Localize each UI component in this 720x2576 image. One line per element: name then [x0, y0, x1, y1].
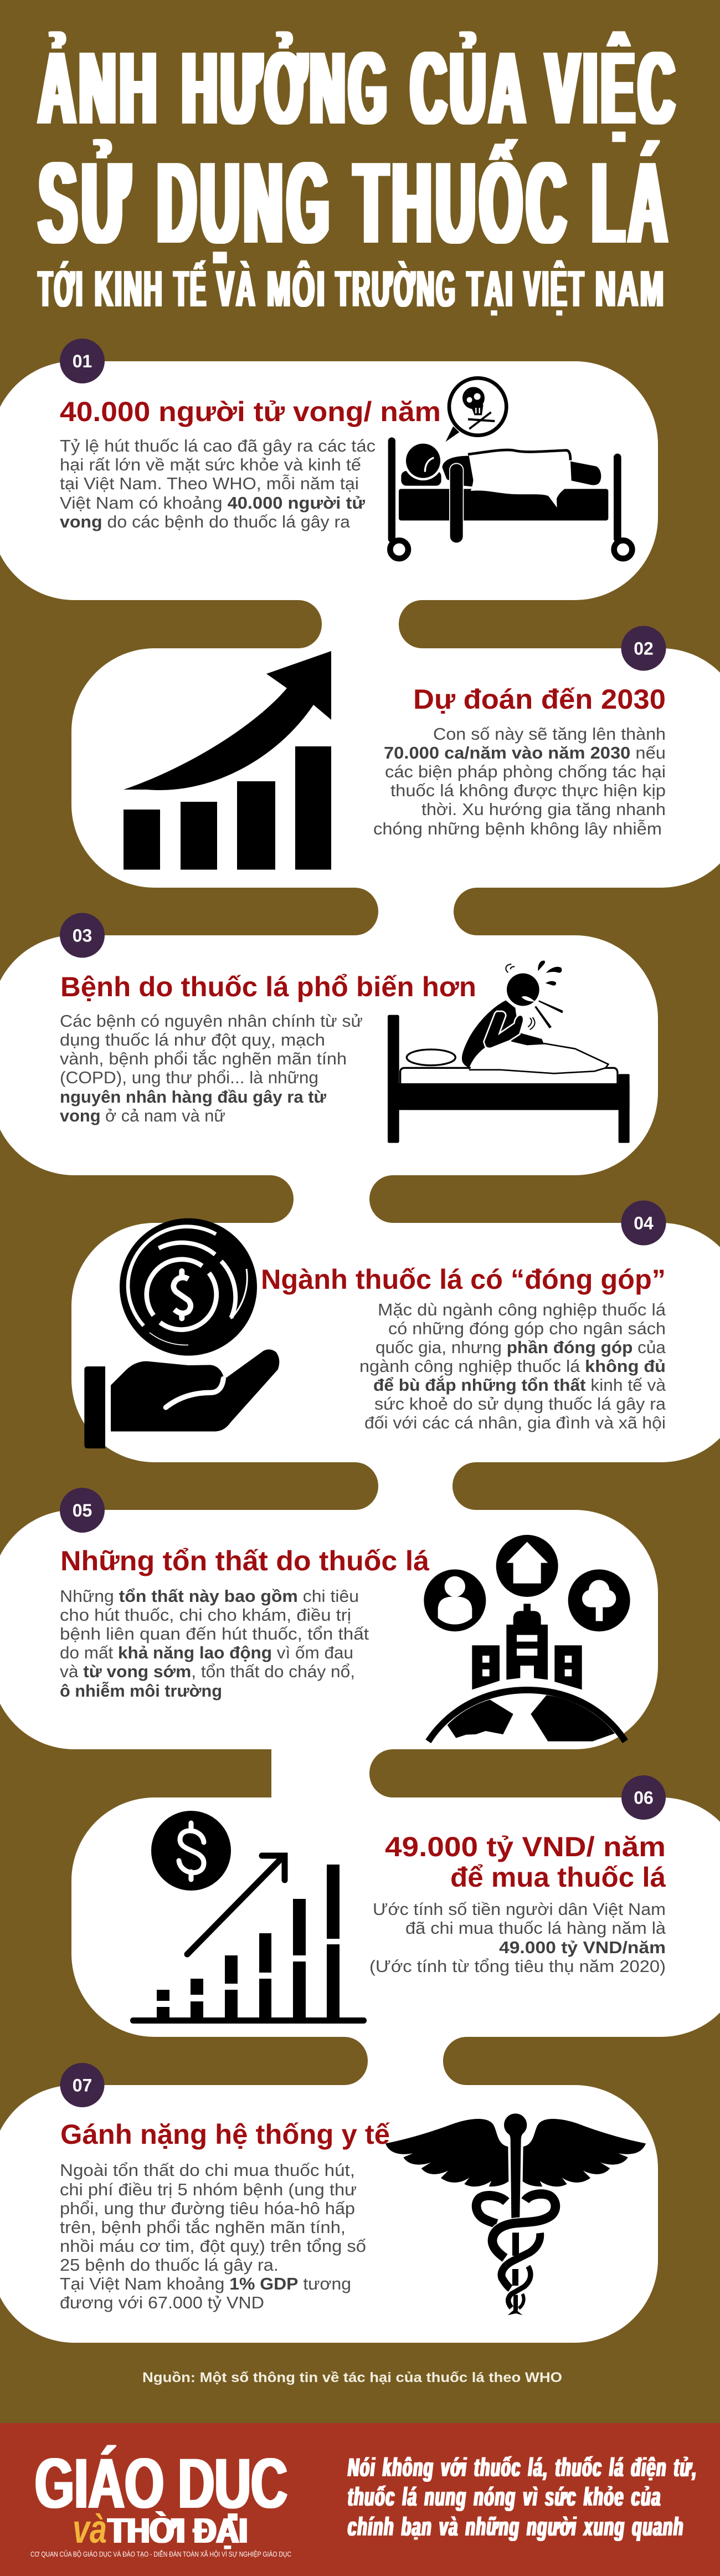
body 07: [60, 2160, 366, 2312]
logo: THỜI ĐẠI: [108, 2511, 248, 2551]
heading 01: 40.000 người tử vong/ năm: [60, 396, 441, 427]
logo: và: [73, 2507, 107, 2552]
slogan: [348, 2452, 697, 2541]
body 05: bệnh liên quan đến hút thuốc, tổn thất: [60, 1624, 369, 1643]
body 06: đã chi mua thuốc lá hàng năm là: [405, 1918, 666, 1938]
body 07: đương với 67.000 tỷ VND: [60, 2293, 264, 2312]
footer band: [0, 2423, 720, 2576]
body 06: [369, 1899, 666, 1976]
body 05: Những tổn thất này bao gồm chi tiêu: [60, 1586, 359, 1606]
icon: city on globe with person, house, tree: [424, 1535, 630, 1743]
panel 02: forecast: [71, 626, 720, 888]
body 03: vành, bệnh phổi tắc nghẽn mãn tính: [60, 1049, 347, 1068]
connector 5-6: [271, 1748, 480, 1799]
subtitle: KINH: [95, 260, 164, 317]
heading 07: Gánh nặng hệ thống y tế: [60, 2119, 390, 2150]
body 04: để bù đắp những tổn thất kinh tế và: [373, 1375, 666, 1395]
body 01: Việt Nam có khoảng 40.000 người tử: [60, 493, 366, 513]
body 07: Ngoài tổn thất do chi mua thuốc hút,: [60, 2160, 355, 2180]
subtitle: VIỆT: [524, 260, 585, 317]
body 03: [60, 1011, 363, 1125]
body 06: (Ước tính từ tổng tiêu thụ năm 2020): [369, 1957, 666, 1976]
body 02: [373, 724, 666, 838]
badge 06: [621, 1775, 666, 1820]
body 04: quốc gia, nhưng phần đóng góp của: [376, 1338, 666, 1357]
icon: coin with growth bars: [130, 1811, 367, 2024]
body 05: và từ vong sớm, tổn thất do cháy nổ,: [60, 1662, 355, 1681]
heading 03: Bệnh do thuốc lá phổ biến hơn: [60, 971, 476, 1002]
connector 4-5: [268, 1461, 563, 1512]
body 01: Tỷ lệ hút thuốc lá cao đã gây ra các tác: [60, 436, 376, 455]
subtitle: TẠI: [467, 260, 515, 317]
badge 02: [621, 626, 666, 670]
badge 07: 07: [73, 2076, 92, 2096]
body 02: 70.000 ca/năm vào năm 2030 nếu: [384, 743, 666, 762]
panel 05: losses: [0, 1488, 658, 1749]
badge 05: 05: [73, 1500, 92, 1520]
body 01: vong do các bệnh do thuốc lá gây ra: [60, 512, 351, 531]
logo: CƠ QUAN CỦA BỘ GIÁO DỤC VÀ ĐÀO TẠO - DIỄN ĐÀN TOÀN XÃ HỘI VÌ SỰ NGHIỆP GIÁO DỤC: [30, 2550, 291, 2558]
title: DỤNG: [157, 139, 333, 268]
body 07: 25 bệnh do thuốc lá gây ra.: [60, 2255, 279, 2275]
heading 06: [385, 1831, 666, 1893]
connector 1-2: [211, 598, 510, 650]
body 04: sức khoẻ do sử dụng thuốc lá gây ra: [374, 1394, 666, 1414]
body 07: phổi, ung thư đường tiêu hóa-hô hấp: [60, 2199, 355, 2218]
body 03: Các bệnh có nguyên nhân chính từ sử: [60, 1011, 363, 1031]
heading 02: Dự đoán đến 2030: [413, 684, 666, 715]
panel 04: industry contribution: [71, 1200, 720, 1462]
heading 05: Những tổn thất do thuốc lá: [60, 1545, 429, 1576]
subtitle: TỚI: [38, 260, 84, 317]
badge 01: [60, 339, 105, 383]
panel 03: diseases: [0, 913, 658, 1175]
panel 06: money spent: [71, 1775, 720, 2037]
body 02: Con số này sẽ tăng lên thành: [433, 724, 666, 744]
body 04: có những đóng góp cho ngân sách: [388, 1319, 666, 1338]
subtitle: MÔI: [267, 260, 327, 317]
subtitle: TẾ: [174, 260, 208, 317]
panel 07: health burden: [0, 2063, 658, 2343]
icon: person coughing in bed: [388, 961, 630, 1143]
body 07: Tại Việt Nam khoảng 1% GDP tương: [60, 2274, 351, 2293]
icon: patient in bed with skull thought: [388, 378, 632, 559]
panel 01: deaths: [0, 339, 658, 600]
body 05: ô nhiễm môi trường: [60, 1681, 222, 1701]
body 03: dụng thuốc lá như đột quỵ, mạch: [60, 1030, 325, 1049]
source note: Nguồn: Một số thông tin về tác hại của thuốc lá theo WHO: [142, 2370, 562, 2385]
icon: hand holding coin: [84, 1218, 279, 1448]
icon: rising bar chart with arrow: [124, 651, 331, 870]
subtitle: TRƯỜNG: [336, 260, 457, 317]
subtitle: VÀ: [217, 260, 257, 317]
heading 06: 49.000 tỷ VND/ năm: [385, 1831, 666, 1862]
body 03: nguyên nhân hàng đầu gây ra từ: [60, 1087, 327, 1107]
body 04: ngành công nghiệp thuốc lá không đủ: [359, 1356, 666, 1376]
logo: GIÁO DỤC: [35, 2444, 287, 2523]
badge 07: [60, 2063, 104, 2107]
title: CỦA: [411, 31, 529, 146]
title: ẢNH: [39, 31, 161, 146]
title: SỬ: [39, 139, 134, 268]
body 02: thuốc lá không được thực hiện kịp: [390, 781, 666, 800]
body 04: [359, 1300, 666, 1432]
badge 03: 03: [73, 925, 92, 945]
badge 05: [60, 1488, 105, 1533]
subtitle: [38, 260, 666, 317]
body 01: tại Việt Nam. Theo WHO, mỗi năm tại: [60, 474, 359, 493]
badge 01: 01: [73, 351, 92, 371]
heading 06: để mua thuốc lá: [450, 1862, 666, 1893]
body 07: nhồi máu cơ tim, đột quỵ) trên tổng số: [60, 2236, 366, 2256]
logo: [30, 2444, 291, 2558]
body 03: (COPD), ung thư phổi... là những: [60, 1068, 318, 1087]
badge 04: 04: [634, 1213, 654, 1233]
connector 6-7: [257, 2035, 554, 2087]
body 02: chóng những bệnh không lây nhiễm: [373, 819, 662, 838]
body 01: hại rất lớn về mặt sức khỏe và kinh tế: [60, 455, 361, 474]
body 07: chi phí điều trị 5 nhóm bệnh (ung thư: [60, 2180, 357, 2199]
body 06: 49.000 tỷ VND/năm: [499, 1938, 666, 1957]
heading 04: Ngành thuốc lá có “đóng góp”: [261, 1264, 666, 1295]
connector 2-3: [268, 886, 564, 937]
title: HƯỞNG: [182, 31, 390, 146]
body 02: các biện pháp phòng chống tác hại: [385, 762, 666, 781]
icon: caduceus: [385, 2113, 646, 2315]
body 03: vong ở cả nam và nữ: [60, 1106, 225, 1125]
badge 02: 02: [634, 638, 654, 658]
badge 03: [60, 913, 105, 957]
body 02: thời. Xu hướng gia tăng nhanh: [421, 800, 666, 819]
badge 06: 06: [634, 1788, 654, 1807]
badge 04: [621, 1200, 666, 1246]
body 01: [60, 436, 376, 531]
body 05: cho hút thuốc, chi cho khám, điều trị: [60, 1605, 351, 1625]
body 04: Mặc dù ngành công nghiệp thuốc lá: [378, 1300, 666, 1319]
body 07: trên, bệnh phổi tắc nghẽn mãn tính,: [60, 2217, 346, 2237]
body 05: [60, 1586, 369, 1701]
body 04: đối với các cá nhân, gia đình và xã hội: [364, 1413, 666, 1432]
title: [39, 31, 678, 268]
body 06: Ước tính số tiền người dân Việt Nam: [373, 1899, 666, 1919]
body 05: do mất khả năng lao động vì ốm đau: [60, 1643, 353, 1662]
connector 3-4: [183, 1174, 480, 1225]
